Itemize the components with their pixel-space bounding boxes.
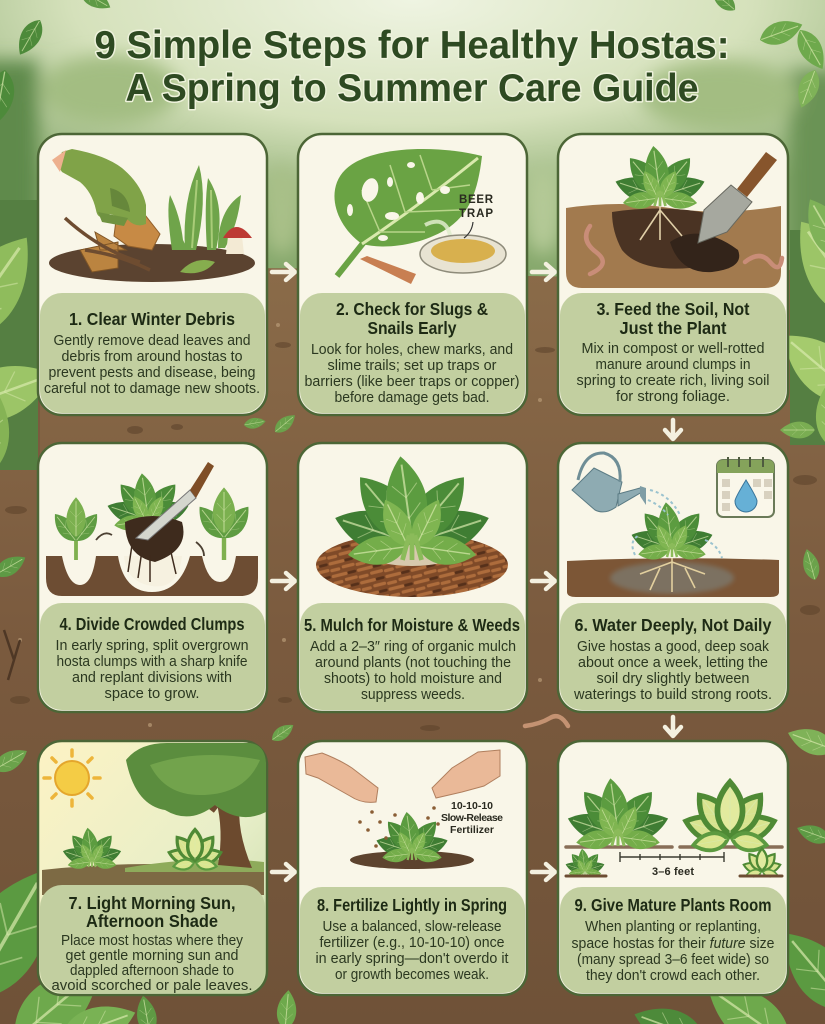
heading: step 3	[596, 299, 750, 338]
text: step 7: dappled afternoon shade to	[70, 963, 234, 979]
text: step 3: manure around clumps in	[596, 357, 750, 373]
icon: calendar with water drop	[717, 457, 774, 517]
text: step 9	[572, 919, 774, 984]
text: step 2: slime trails; set up traps or	[328, 358, 497, 374]
text: step 6: Give hostas a good, deep soak	[577, 639, 770, 655]
heading: step 2: Snails Early	[368, 318, 457, 338]
title: A Spring to Summer Care Guide	[126, 67, 698, 110]
arrow: step 4 to 5	[272, 573, 295, 589]
arrow: step 5 to 6	[532, 573, 555, 589]
heading: step 7: 7. Light Morning Sun,	[68, 893, 236, 913]
icon: beer trap dish with label: TRAP	[459, 208, 493, 220]
text: step 5: suppress weeds.	[361, 687, 465, 703]
text: step 8: or growth becomes weak.	[335, 967, 489, 983]
illustration: divided clump with knife	[46, 462, 258, 596]
illustration: watering can, plant and roots	[567, 453, 779, 597]
arrow: step 2 to 3	[532, 264, 555, 280]
text: step 1: careful not to damage new shoots.	[44, 381, 260, 397]
heading: step 2	[336, 299, 488, 338]
text: step 8: in early spring—don't overdo it	[316, 951, 508, 967]
panel: step 9	[558, 741, 788, 995]
heading: step 9: 9. Give Mature Plants Room	[574, 895, 772, 915]
panel: step 3	[558, 134, 788, 415]
text: step 8: Use a balanced, slow-release	[322, 919, 502, 935]
text: step 9: they don't crowd each other.	[586, 968, 760, 984]
illustration: sun, tree and two plants	[42, 743, 266, 895]
text: step 9: (many spread 3–6 feet wide) so	[577, 952, 769, 968]
text: step 2: before damage gets bad.	[334, 390, 490, 406]
text: step 5: Add a 2–3″ ring of organic mulch	[310, 639, 516, 655]
text: step 8	[316, 919, 508, 983]
arrow: step 3 to 6	[665, 420, 681, 439]
text: step 1	[44, 333, 260, 397]
foliage: left border leaves	[0, 0, 298, 1024]
text: step 4: In early spring, split overgrown	[56, 638, 248, 654]
text: step 6: waterings to build strong roots.	[573, 687, 772, 703]
text: step 5: shoots) to hold moisture and	[324, 671, 502, 687]
text: step 3	[576, 341, 770, 405]
text: step 4: hosta clumps with a sharp knife	[56, 654, 248, 670]
illustration: chewed leaf with holes	[334, 149, 482, 276]
text: step 2: barriers (like beer traps or copper)	[304, 374, 520, 390]
text: step 2: Look for holes, chew marks, and	[311, 342, 513, 358]
heading: step 6: 6. Water Deeply, Not Daily	[574, 615, 772, 635]
text: step 7: get gentle morning sun and	[66, 948, 238, 964]
panel: step 4	[38, 443, 267, 712]
text: step 1: debris from around hostas to	[62, 349, 242, 365]
text: step 8: fertilizer (e.g., 10-10-10) once	[320, 935, 504, 951]
heading: step 3: Just the Plant	[620, 318, 727, 338]
panel: step 7	[38, 741, 267, 995]
text: step 2	[304, 342, 520, 406]
panel: step 8	[298, 741, 527, 995]
text: step 3: for strong foliage.	[616, 389, 730, 405]
illustration: mature plants with spacing marker	[564, 777, 782, 878]
text: step 7	[52, 933, 252, 994]
label: spacing distance: 3–6 feet	[652, 866, 694, 878]
text: step 3: spring to create rich, living soil	[576, 373, 770, 389]
text: step 4: and replant divisions with	[72, 670, 232, 686]
text: step 7: avoid scorched or pale leaves.	[52, 978, 252, 994]
text: step 7: Place most hostas where they	[61, 933, 244, 949]
title	[94, 24, 730, 110]
arrow: step 1 to 2	[272, 264, 295, 280]
heading: step 8: 8. Fertilize Lightly in Spring	[317, 895, 507, 915]
arrow: step 8 to 9	[532, 864, 555, 880]
icon: beer trap dish with label: BEER	[459, 194, 494, 206]
text: step 3: Mix in compost or well-rotted	[582, 341, 764, 357]
heading: step 7: Afternoon Shade	[86, 911, 218, 931]
text: step 1: prevent pests and disease, being	[48, 365, 256, 381]
text: step 5	[310, 639, 516, 703]
title: 9 Simple Steps for Healthy Hostas:	[94, 24, 730, 67]
heading: step 3: 3. Feed the Soil, Not	[596, 299, 750, 319]
foliage: right border leaves	[628, 0, 825, 1024]
icon: beer trap dish with label	[420, 194, 506, 273]
illustration: gloved hand clearing debris	[49, 149, 255, 282]
arrow: step 6 to 9	[665, 717, 681, 736]
illustration: hosta in mulch ring	[316, 454, 508, 597]
text: step 1: Gently remove dead leaves and	[54, 333, 250, 349]
callout: fertilizer label: 10-10-10	[451, 800, 493, 812]
illustration: hands sprinkling fertilizer on plant	[305, 750, 500, 869]
text: step 6: soil dry slightly between	[596, 671, 750, 687]
text: step 9: When planting or replanting,	[585, 919, 761, 935]
callout: fertilizer label: Slow-Release	[441, 812, 503, 824]
illustration: compost soil with plant and trowel	[566, 144, 782, 288]
text: step 5: around plants (not touching the	[315, 655, 511, 671]
heading: step 2: 2. Check for Slugs &	[336, 299, 488, 319]
heading: step 5: 5. Mulch for Moisture & Weeds	[304, 615, 520, 635]
decorative soil details: stray leaves and earthworm	[4, 411, 568, 745]
text: step 4: space to grow.	[104, 686, 200, 702]
text: step 9: space hostas for their future size	[572, 936, 774, 952]
icon: copper strip	[360, 256, 416, 284]
panel: step 2	[298, 134, 527, 415]
text: step 4	[56, 638, 248, 702]
heading: step 1: 1. Clear Winter Debris	[69, 309, 235, 329]
callout: fertilizer label	[441, 800, 503, 836]
heading: step 7	[68, 893, 236, 931]
callout: fertilizer label: Fertilizer	[450, 824, 494, 836]
heading: step 4: 4. Divide Crowded Clumps	[60, 614, 245, 634]
arrow: step 7 to 8	[272, 864, 295, 880]
text: step 6	[573, 639, 772, 703]
panel: step 6	[558, 443, 788, 712]
text: step 6: about once a week, letting the	[578, 655, 768, 671]
panel: step 1	[38, 134, 267, 415]
panel: step 5	[298, 443, 527, 712]
